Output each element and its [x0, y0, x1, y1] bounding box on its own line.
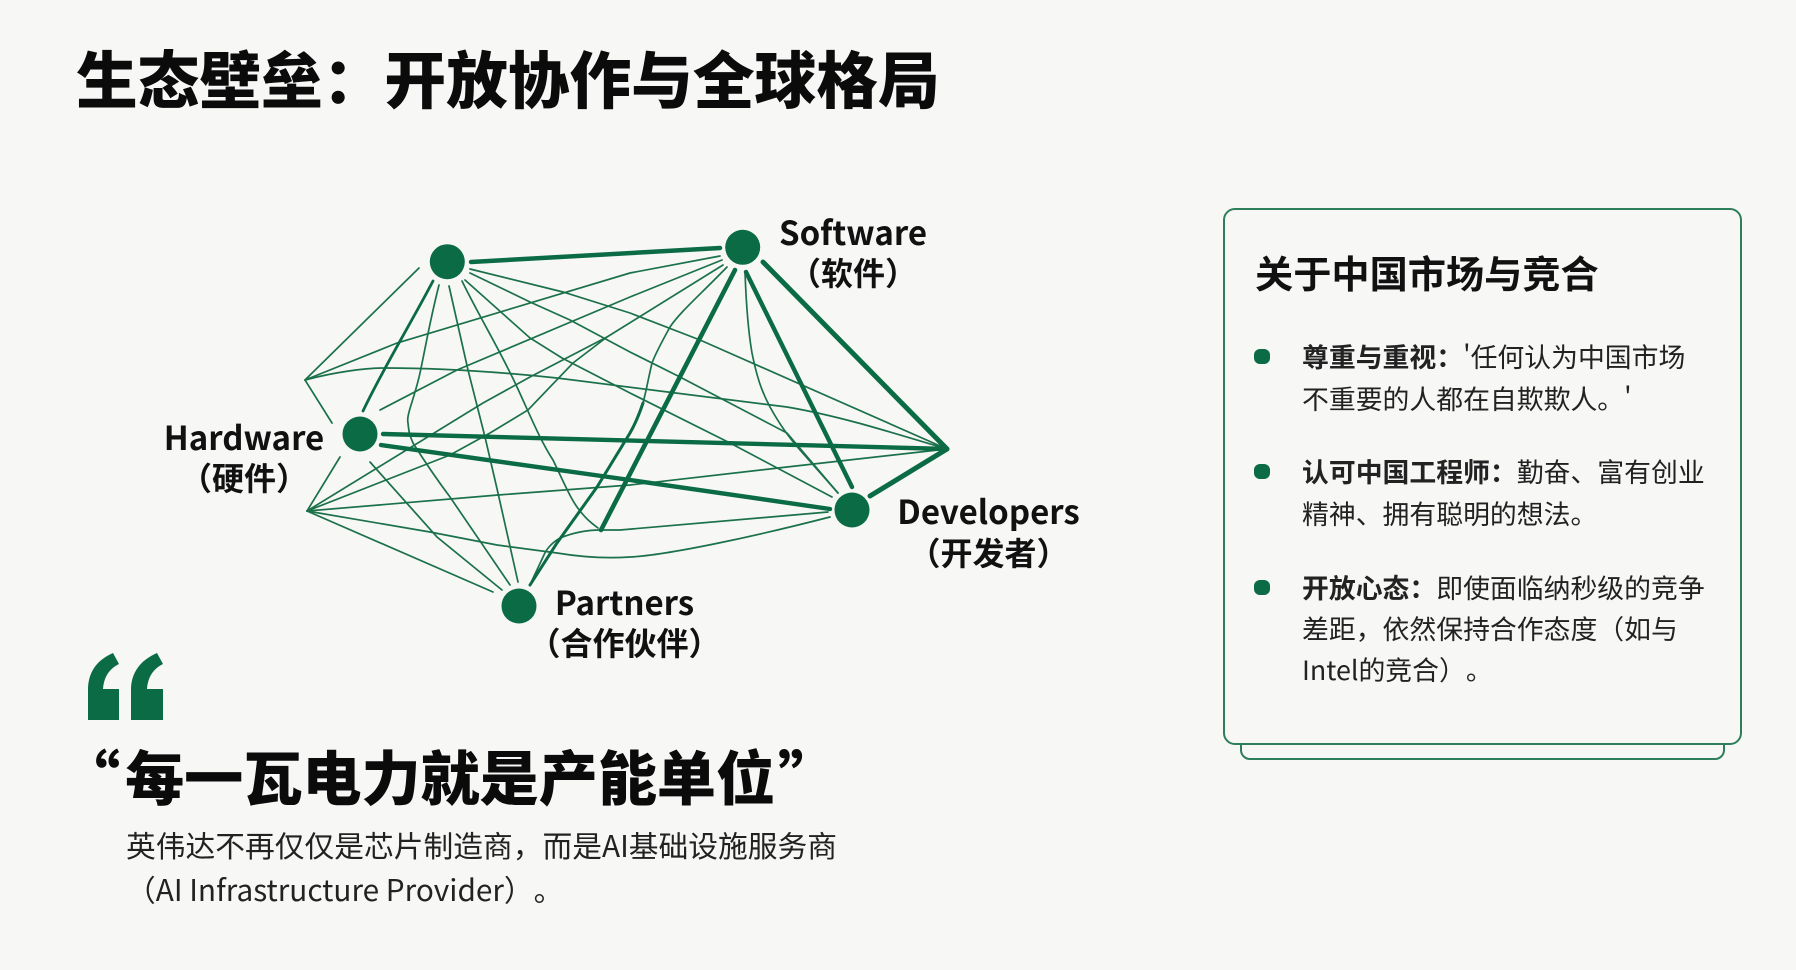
quote description: （AI Infrastructure Provider）。	[126, 866, 563, 910]
node: software	[725, 207, 927, 295]
bullet 2: 认可中国工程师：勤奋、富有创业	[1302, 450, 1705, 490]
node: partners: Partners	[555, 577, 694, 625]
bullet 3	[1254, 566, 1705, 688]
bullet 1: 不重要的人都在自欺欺人。'	[1302, 378, 1632, 416]
bullet 1	[1254, 336, 1685, 416]
icon: quotation mark	[88, 653, 163, 720]
bullet 3: 差距，依然保持合作态度（如与	[1302, 608, 1678, 646]
thin connection lines	[305, 256, 947, 592]
node: software: Software	[779, 207, 927, 255]
bullet 3: Intel的竞合）。	[1302, 648, 1493, 688]
bullet 3: 开放心态：即使面临纳秒级的竞争	[1302, 566, 1705, 606]
bullet 2	[1254, 450, 1705, 532]
node: top left	[430, 244, 465, 279]
node: hardware: Hardware	[164, 412, 324, 460]
node: partners	[502, 577, 721, 665]
panel heading: 关于中国市场与竞合	[1255, 245, 1599, 300]
panel: China market and co-opetition	[1223, 208, 1742, 745]
title: 生态壁垒：开放协作与全球格局	[76, 31, 940, 121]
node: developers: Developers	[897, 486, 1080, 534]
node: software: （软件）	[789, 249, 917, 295]
node: developers: （开发者）	[908, 529, 1069, 575]
node: partners: （合作伙伴）	[528, 619, 721, 665]
quote description: 英伟达不再仅仅是芯片制造商，而是AI基础设施服务商	[126, 822, 837, 866]
bullet 1: 尊重与重视：'任何认为中国市场	[1302, 336, 1685, 374]
node: hardware: （硬件）	[180, 454, 308, 500]
quote headline: “每一瓦电力就是产能单位”	[61, 732, 837, 818]
panel: back card edge	[1240, 720, 1725, 760]
bullet 2: 精神、拥有聪明的想法。	[1302, 492, 1597, 532]
node: developers	[834, 486, 1080, 575]
thick connection lines	[363, 248, 947, 585]
quote description	[126, 822, 837, 910]
node: hardware	[164, 412, 378, 500]
